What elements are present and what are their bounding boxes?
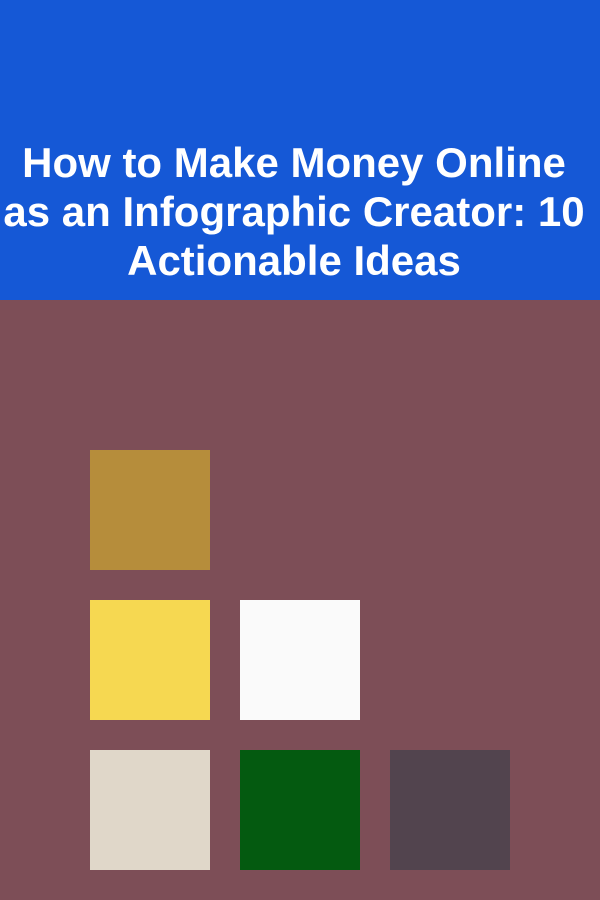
header banner [0,0,600,300]
panel: colour swatch area [0,300,600,900]
title: as an Infographic Creator: 10 [3,188,585,235]
swatch: yellow [90,600,210,720]
title: How to Make Money Online [22,139,566,186]
swatch: dark green [240,750,360,870]
swatch: beige [90,750,210,870]
title: Actionable Ideas [127,237,461,284]
swatch: ochre [90,450,210,570]
swatch: dark mauve [390,750,510,870]
title [3,139,585,284]
swatch: white [240,600,360,720]
